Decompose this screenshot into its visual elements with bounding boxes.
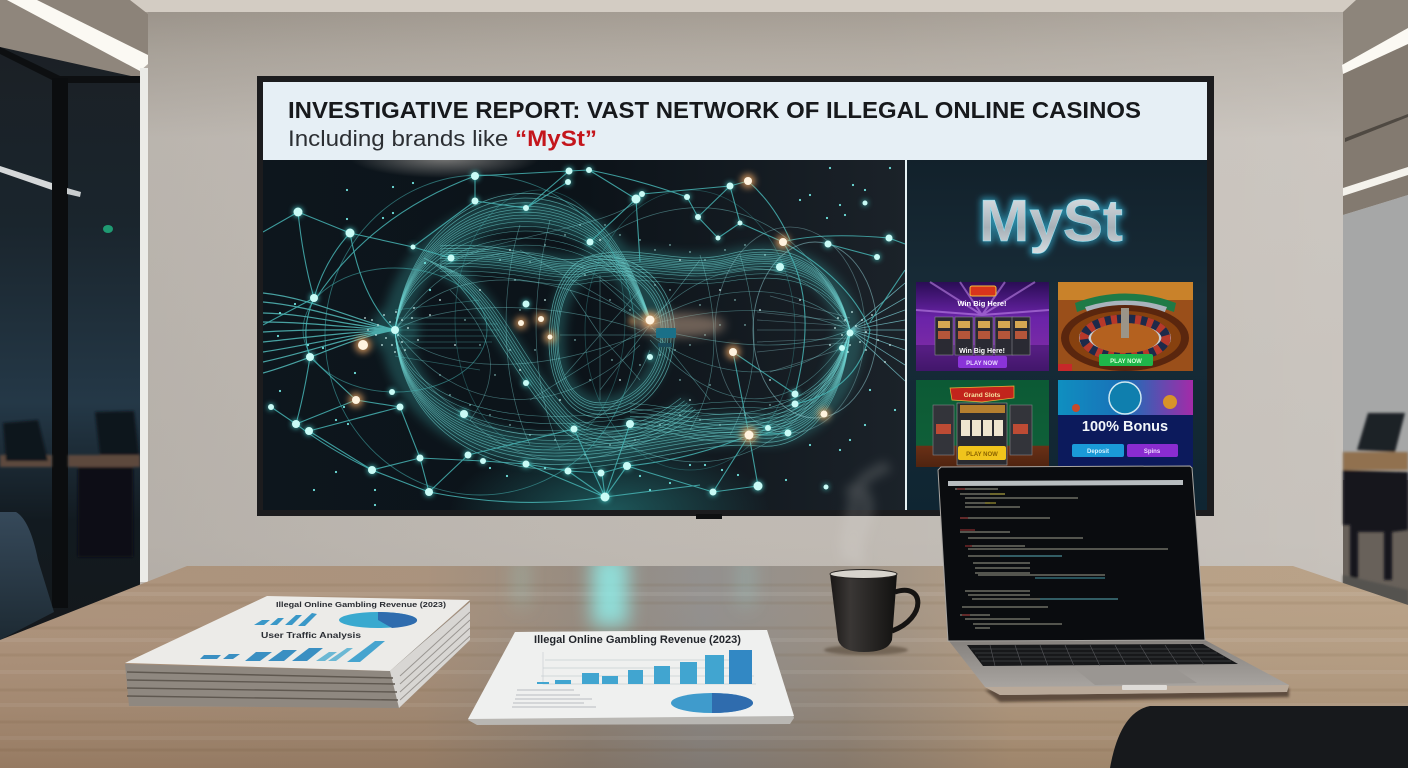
left glass partition — [0, 0, 148, 640]
stack title: Illegal Online Gambling Revenue (2023) — [276, 600, 447, 609]
header banner — [263, 82, 1207, 160]
casino tile: green slots: PLAY NOW — [966, 452, 998, 458]
scattered tiny dots — [278, 168, 895, 505]
conference table — [0, 556, 1408, 768]
laptop screen — [938, 466, 1205, 641]
central label chip — [656, 328, 676, 347]
left foreground chair — [0, 512, 54, 640]
casino tile: purple slots: Win Big Here! — [957, 299, 1007, 308]
right wall and distant room — [1342, 0, 1408, 610]
stack subtitle: User Traffic Analysis — [261, 630, 361, 640]
casino tile: 100% bonus: Deposit — [1087, 449, 1109, 455]
MySt logo: MySt — [979, 188, 1123, 254]
secondary wide arcs — [395, 200, 850, 462]
casino tile: 100% bonus — [1058, 380, 1193, 467]
code lines — [955, 489, 1168, 628]
casino tile: roulette — [1058, 282, 1193, 371]
teal network nodes — [268, 167, 892, 502]
coffee mug — [824, 570, 918, 655]
laptop base and keyboard — [949, 640, 1289, 695]
report pie chart — [671, 693, 753, 713]
casino tile: purple slots: PLAY NOW — [966, 361, 998, 367]
central warm cloud — [635, 313, 725, 337]
casino tile: green slots — [916, 380, 1049, 467]
casino tile: purple slots — [916, 282, 1049, 371]
amber network nodes — [349, 174, 830, 443]
stack of printed reports — [125, 596, 470, 708]
title: INVESTIGATIVE REPORT: VAST NETWORK OF ILLEGAL ONLINE CASINOS — [288, 97, 1141, 123]
report title: Illegal Online Gambling Revenue (2023) — [534, 634, 741, 646]
soft glowing bands — [371, 212, 850, 450]
report text lines — [512, 690, 596, 707]
stack upper bars — [254, 613, 317, 626]
casino tile: 100% bonus: Spins — [1144, 449, 1161, 455]
steam from mug — [846, 465, 888, 565]
casino tile: green slots: Grand Slots — [964, 392, 1001, 399]
report bar chart — [537, 650, 756, 684]
foreground chair — [1110, 706, 1408, 768]
laptop — [938, 466, 1289, 702]
subtitle: Including brands like “MySt” — [288, 126, 597, 151]
single printed report — [468, 630, 794, 725]
bonus heading: 100% Bonus — [1082, 419, 1168, 435]
casino tile: roulette: PLAY NOW — [1110, 359, 1142, 365]
network graph panel — [263, 160, 905, 510]
outer network links — [263, 170, 905, 502]
MySt logo glow: MySt — [979, 188, 1123, 254]
stack lower bars — [200, 648, 323, 661]
brand panel — [905, 160, 1207, 510]
casino tile: purple slots: Win Big Here! — [959, 348, 1005, 355]
wall-mounted display — [257, 76, 1214, 519]
dense line bundles — [395, 193, 850, 469]
stack pie chart — [339, 612, 417, 628]
hub fan lines — [263, 283, 905, 381]
distant table and chairs in glass — [0, 411, 140, 557]
